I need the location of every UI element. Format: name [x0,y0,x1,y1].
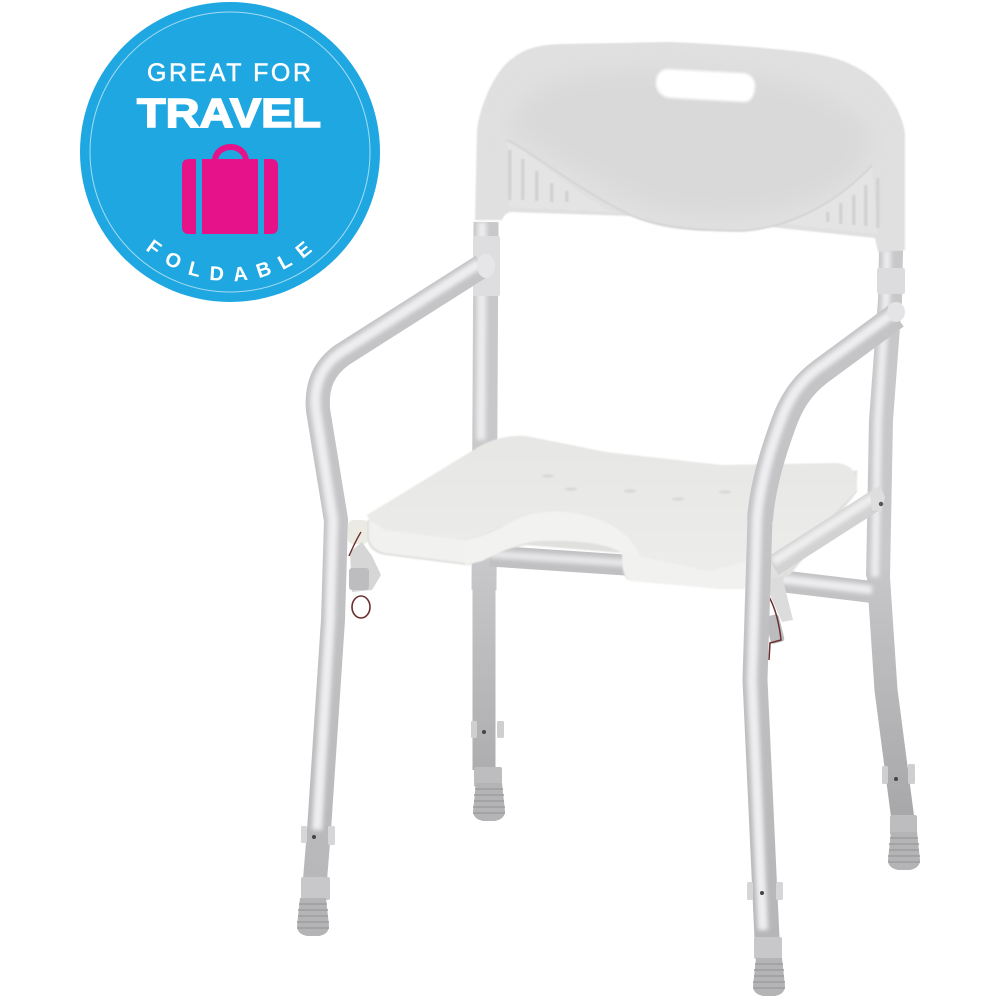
cross bars under seat [490,554,872,592]
backrest side shading, right [785,167,878,234]
seat side edge [367,470,857,589]
right front rubber tip [753,958,785,996]
rear left rubber tip [473,783,505,821]
right front ferrule [754,937,782,959]
seat left lobe front highlight [369,520,465,563]
chair seat [367,436,857,589]
backrest raised centre panel [507,140,872,231]
left arm joint [477,254,495,278]
rear left sleeve collar [473,236,500,296]
rear right ferrule [890,815,917,835]
chair backrest [475,42,905,252]
rear left leg [471,222,505,821]
seat right lobe front face [622,553,770,589]
backrest side shading, left [507,142,612,212]
fold bar end bracket [870,485,885,512]
badge disc [80,2,380,302]
backrest shell [475,42,905,252]
left hinge and pull ring [348,520,381,618]
backrest left vents [508,150,568,202]
right front height clip [747,882,783,900]
badge curved label: foldable [101,152,359,281]
rear right height clip [882,764,915,784]
left front rubber tip [297,898,329,936]
right hinge and pull strap [765,555,795,660]
seat drain holes [542,474,731,501]
rear right leg [875,250,920,870]
icon: suitcase [182,144,278,234]
backrest right vents [826,178,880,228]
rear right rubber tip [888,832,920,870]
left arm and front leg [297,254,495,936]
badge heading: great for: GREAT FOR [147,59,311,87]
backrest soft shading [510,70,870,215]
badge: great for travel: FOLDABLE [146,239,312,282]
rear left height clip [471,721,504,738]
badge inner ring [90,12,370,292]
seat cutout inner wall [465,511,640,565]
backrest carry handle cutout [656,69,755,102]
right fold bar [773,485,885,566]
seat top surface [367,436,857,571]
right arm and front leg [747,302,905,996]
badge heading: travel: TRAVEL [137,90,321,136]
left front ferrule [301,877,330,900]
rear left ferrule [474,767,502,787]
right arm joint [887,302,905,322]
rear right sleeve collar [877,268,905,294]
left front height clip [301,826,335,845]
badge: great for travel [80,2,380,302]
